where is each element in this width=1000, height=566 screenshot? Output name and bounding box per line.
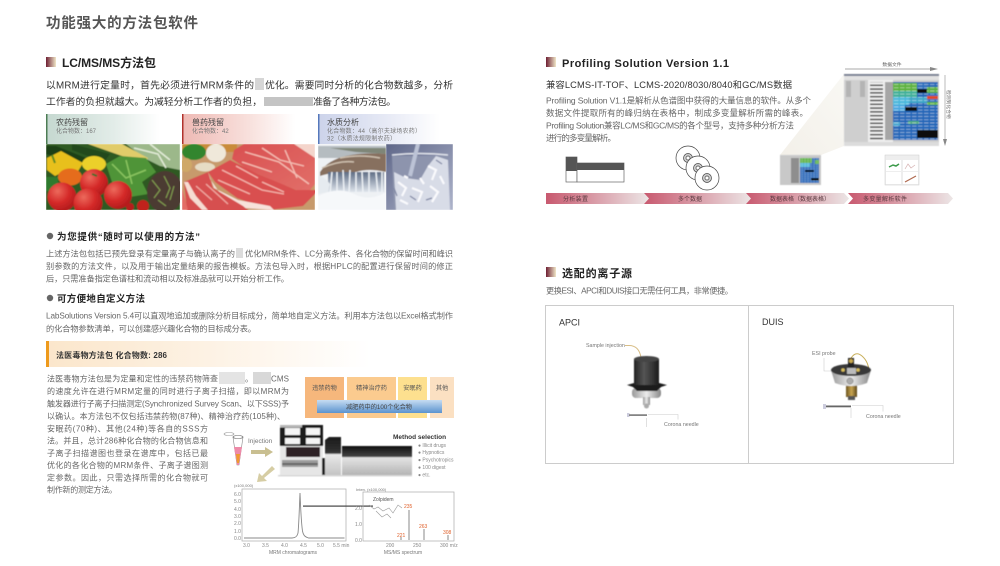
photo: glass of water <box>386 144 453 210</box>
description: 更换ESI、APCI和DUIS接口无需任何工具，非常便捷。 <box>546 286 733 296</box>
forensic description text: 的速度允许在进行MRM定量的同时进行子离子扫描，即以MRM为 <box>47 386 289 396</box>
chart: MS/MS spectrum: 1.0 <box>355 522 362 528</box>
axis arrow: detected compounds: 检测到化合物 <box>945 90 952 119</box>
panel: veterinary drug residues <box>180 114 317 211</box>
method selection list: ● Psychotropics <box>418 458 454 464</box>
instrument: LC-MS/MS system <box>278 425 412 476</box>
workflow arrows <box>546 193 953 204</box>
device: APCI probe <box>627 356 667 408</box>
intro text: 工作者的负担就越大。为减轻分析工作者的负担， <box>46 95 262 108</box>
bullet <box>47 233 53 239</box>
axis arrow: data files: 数据文件 <box>882 61 902 68</box>
body text: Profiling Solution兼容LC/MS和GC/MS的各个型号，支持多种分析方法 <box>546 120 794 130</box>
chart: MS/MS spectrum: Zolpidem <box>373 497 394 503</box>
forensic description text: 安眠药(70种)、其他(24种)等各自的SSS方 <box>47 424 208 434</box>
body text <box>546 96 811 143</box>
method selection list: ● Illicit drugs <box>418 443 447 449</box>
section: LC/MS/MS method packages <box>46 55 453 108</box>
chart: MRM chromatogram: 0.0 <box>234 536 241 542</box>
forensic toxicology banner: 法医毒物方法包 化合物数: 286 <box>56 350 168 360</box>
forensic description text: 。 <box>245 374 253 384</box>
enlarged data table <box>844 74 939 146</box>
injection arrow: Injection <box>248 438 273 445</box>
forensic description text: 子离子扫描谱图也登录在谱库中，包括已最 <box>47 448 208 458</box>
chart: compound categories: 安眠药 <box>403 384 422 392</box>
icon: multivariate charts <box>885 155 919 185</box>
panel: DUIS: Corona needle <box>866 414 901 420</box>
method selection list: ● 100 digest <box>418 465 446 471</box>
body text: 别参数的方法文件，以及用于输出定量结果的报告模板。方法包导入时，根据HPLC的配置进行保留时间的修正 <box>46 261 453 271</box>
chart: MRM chromatogram: 5.0 <box>234 499 241 505</box>
chart: MS/MS spectrum: 250 <box>413 543 422 549</box>
subsection: ready to use methods: 为您提供“随时可以使用的方法” <box>57 231 200 243</box>
subsection: custom methods: 可方便地自定义方法 <box>57 293 145 305</box>
panel: water analysis: 32（水质法规限制农药） <box>327 134 396 142</box>
chart: MRM chromatogram: 5.0 <box>317 543 324 549</box>
step: multiple data <box>644 193 752 204</box>
panel: DUIS: ESI probe <box>812 351 836 357</box>
forensic description text <box>47 372 289 494</box>
chart: compound categories: 违禁药物 <box>312 384 337 392</box>
chart: compound categories: 其他 <box>436 384 448 392</box>
chart: compound categories: 减肥药中的100个化合物 <box>346 403 412 411</box>
icon: data discs <box>676 146 719 190</box>
heading: Profiling Solution Version 1.1 <box>562 58 729 70</box>
chart: MS/MS spectrum: 200 <box>386 543 395 549</box>
corona needle <box>627 413 678 427</box>
panel: water analysis: 水质分析 <box>327 117 359 127</box>
chart: MRM chromatogram: 3.0 <box>234 514 241 520</box>
chart: MRM chromatogram: 6.0 <box>234 492 241 498</box>
panel: APCI: APCI <box>559 318 580 328</box>
chart: MRM chromatogram: 1.0 <box>234 529 241 535</box>
intro text: 准备了各种方法包。 <box>313 95 396 108</box>
forensic description text: 以确认。本方法包不仅包括违禁药物(87种)、精神治疗药(105种)、 <box>47 411 285 421</box>
step: multivariate software <box>848 193 953 204</box>
photo: vegetables <box>46 144 180 210</box>
chart: MS/MS spectrum: 221 <box>397 533 406 539</box>
intro text: 以MRM进行定量时，首先必须进行MRM条件的 <box>46 78 254 92</box>
chart: MRM chromatogram: 4.0 <box>234 507 241 513</box>
chart: MRM chromatogram: 5.5 min <box>333 543 350 549</box>
intro text <box>46 78 453 108</box>
panel: APCI: Sample injection <box>586 343 625 349</box>
method selection list <box>393 434 454 478</box>
icon: small data table <box>780 155 821 185</box>
panel: DUIS <box>762 317 901 420</box>
body text: 上述方法包包括已预先登录有定量离子与确认离子的 <box>46 248 235 258</box>
subsection: ready to use methods <box>46 231 453 284</box>
panel: pesticide residues: 化合物数：167 <box>56 127 97 135</box>
chart: MS/MS spectrum: 235 <box>404 504 413 510</box>
forensic description text: 触发器进行子离子扫描测定(Synchronized Survey Scan、以下SSS)予 <box>47 398 289 408</box>
panel: APCI: Corona needle <box>664 422 699 428</box>
forensic description text: 定参数。因此，只需选择所需的化合物就可 <box>47 472 208 482</box>
axis arrow: data files <box>845 61 938 71</box>
panel: veterinary drug residues: 兽药残留 <box>192 117 224 127</box>
panel: ion source table <box>546 305 954 464</box>
step: analysis instrument <box>546 193 649 204</box>
connector line <box>303 506 373 507</box>
body text: Profiling Solution V1.1是解析从色谱图中获得的大量信息的软件。从多个 <box>546 96 811 106</box>
section: optional ion sources <box>546 266 733 296</box>
injection arrow <box>248 438 273 457</box>
chart: compound categories: 精神治疗药 <box>356 384 387 392</box>
corona needle <box>823 404 883 418</box>
chart: MRM chromatogram <box>234 483 350 556</box>
panel: pesticide residues: 农药残留 <box>56 117 88 127</box>
photo: meat <box>180 144 317 211</box>
step: data table: 数据表格（数据表格） <box>770 195 830 203</box>
chart: MRM chromatogram: MRM chromatograms <box>269 550 318 556</box>
chart: MS/MS spectrum <box>355 487 458 556</box>
arrow: to chromatogram <box>257 466 275 482</box>
wedge and enlarged table <box>780 61 952 155</box>
forensic description text: CMS <box>271 374 289 384</box>
chart: MS/MS spectrum: 263 <box>419 524 428 530</box>
step: multivariate software: 多变量解析软件 <box>863 195 907 203</box>
panel: water analysis: 化合物数：44（高尔夫球场农药） <box>327 127 421 135</box>
heading: 选配的离子源 <box>562 266 632 280</box>
subheading: 兼容LCMS-IT-TOF、LCMS-2020/8030/8040和GC/MS数据 <box>546 79 792 90</box>
step: data table <box>746 193 849 204</box>
photo: waterfall <box>318 144 386 210</box>
intro text: 优化。需要同时分析的化合物数越多，分析 <box>265 78 453 92</box>
forensic description text: 法。并且，总计286种化合物的化合物信息和 <box>47 436 208 446</box>
method selection list: Method selection <box>393 434 446 441</box>
bullet <box>47 295 53 301</box>
chart: MS/MS spectrum: 2.0 <box>355 506 362 512</box>
body text <box>46 310 453 334</box>
panel: APCI <box>559 318 699 428</box>
forensic description text: 优化的各化合物的MRM条件、子离子谱图测 <box>47 460 208 470</box>
icon: instrument outline <box>566 157 624 182</box>
body text: 后，只需准备指定色谱柱和流动相以及标准品就可以开始分析工作。 <box>46 274 289 284</box>
body text <box>46 248 453 284</box>
subsection: custom methods <box>46 293 453 334</box>
chart: MS/MS spectrum: 300 m/z <box>440 543 458 549</box>
forensic description text: 制作新的测定方法。 <box>47 484 117 494</box>
chart: MS/MS spectrum: 0.0 <box>355 538 362 544</box>
chart: MRM chromatogram: 3.0 <box>243 543 250 549</box>
step: multiple data: 多个数据 <box>678 195 702 203</box>
chart: MRM chromatogram: 3.5 <box>262 543 269 549</box>
chart: MRM chromatogram: (x100,000) <box>234 483 254 488</box>
chart: MS/MS spectrum: MS/MS spectrum <box>384 550 422 556</box>
chart: MRM chromatogram: 4.0 <box>281 543 288 549</box>
forensic description text: 法医毒物方法包是为定量和定性的违禁药物筛查 <box>47 374 218 384</box>
forensic toxicology banner <box>46 341 370 367</box>
section heading: LC/MS/MS方法包 <box>62 55 156 70</box>
heading <box>546 266 632 280</box>
title: 功能强大的方法包软件 <box>46 14 198 32</box>
panel: veterinary drug residues: 化合物数：42 <box>192 127 229 135</box>
body text: 进行的多变量解析。 <box>546 133 616 143</box>
panel: water analysis <box>318 114 453 210</box>
panel: DUIS: DUIS <box>762 317 784 327</box>
body text: 数据文件提取所有的峰归纳在表格中，制成多变量解析所需的峰表。 <box>546 108 808 118</box>
chart: compound categories <box>305 377 454 418</box>
body text: LabSolutions Version 5.4可以直观地追加或删除分析目标成分，简单地自定义方法。利用本方法包以Excel格式制作 <box>46 310 453 320</box>
body text: 的化合物参数清单，可以创建感兴趣化合物的目标成分表。 <box>46 324 256 334</box>
chart: MRM chromatogram: 4.5 <box>300 543 307 549</box>
body text: 优化MRM条件、LC分离条件、各化合物的保留时间和峰识 <box>245 248 453 258</box>
chart: MS/MS spectrum: Inten. (x100,000) <box>356 487 387 492</box>
section: Profiling Solution <box>546 57 811 143</box>
panel: pesticide residues <box>46 114 183 218</box>
axis arrow: detected compounds <box>943 75 952 146</box>
method selection list: ● Hypnotics <box>418 450 445 456</box>
method selection list: ● etc. <box>418 472 430 478</box>
chart: MS/MS spectrum: 308 <box>443 530 452 536</box>
device: DUIS probe <box>831 358 871 400</box>
icon: sample vial <box>224 432 243 465</box>
step: analysis instrument: 分析装置 <box>563 195 588 203</box>
chart: MRM chromatogram: 2.0 <box>234 521 241 527</box>
